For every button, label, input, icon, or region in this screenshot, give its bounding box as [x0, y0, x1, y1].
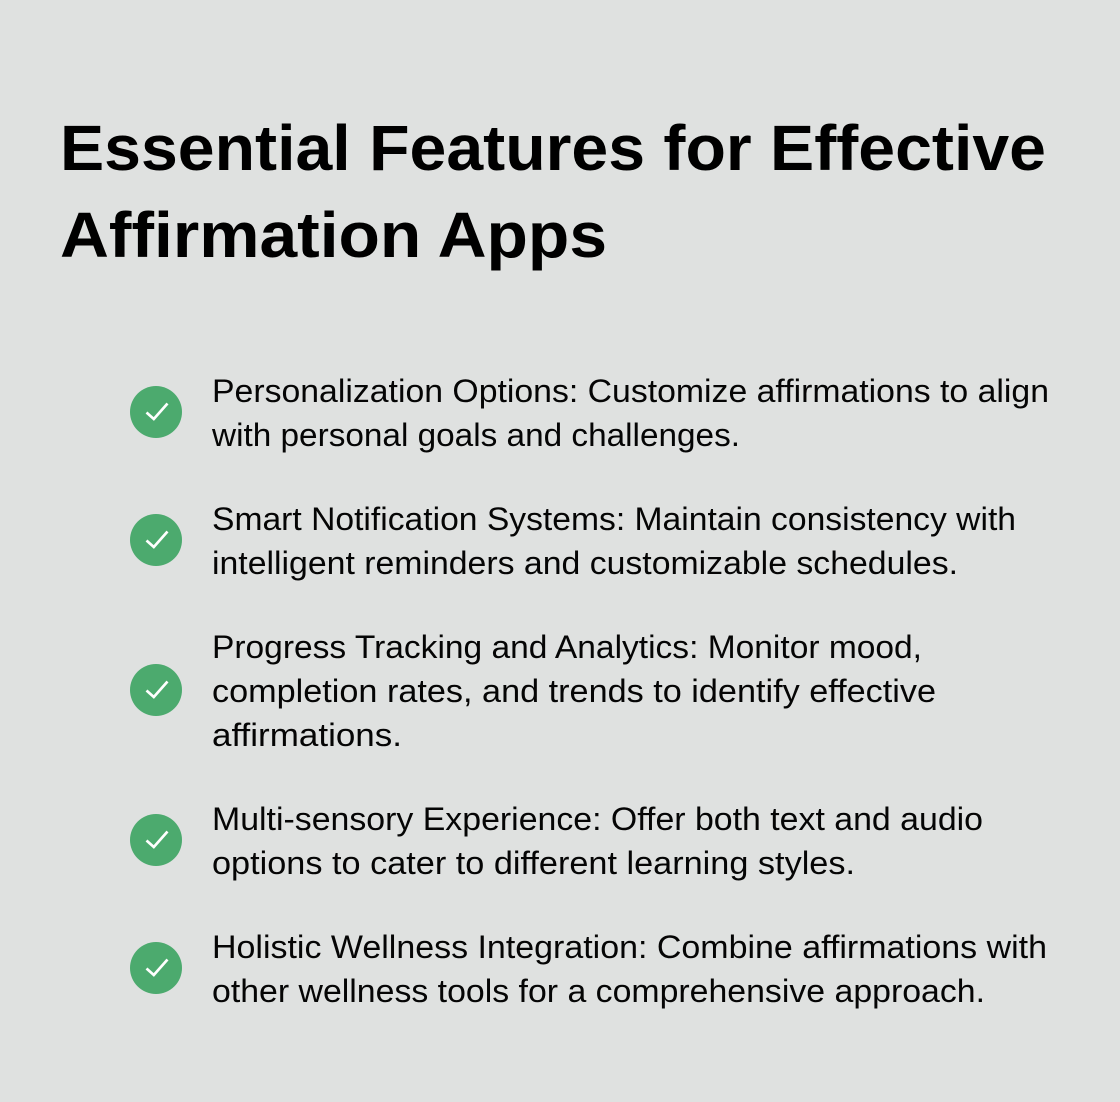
icon: green check circle: [130, 386, 182, 438]
title: [60, 112, 1046, 271]
text: holistic wellness integration: other wellness tools for a comprehensive approach.: [212, 973, 985, 1009]
text: multi-sensory experience: [212, 801, 983, 881]
text: multi-sensory experience: options to cater to different learning styles.: [212, 845, 855, 881]
icon: green check circle: [130, 942, 182, 994]
text: progress tracking and analytics: completion rates, and trends to identify effective: [212, 673, 936, 709]
text: smart notification systems: intelligent reminders and customizable schedules.: [212, 545, 958, 581]
text: holistic wellness integration: Holistic Wellness Integration: Combine affirmations with: [212, 929, 1047, 965]
text: multi-sensory experience: Multi-sensory Experience: Offer both text and audio: [212, 801, 983, 837]
text: progress tracking and analytics: affirmations.: [212, 717, 402, 753]
icon: green check circle: [130, 514, 182, 566]
text: progress tracking and analytics: Progress Tracking and Analytics: Monitor mood,: [212, 629, 922, 665]
feature list: [130, 373, 1049, 1009]
item: progress tracking and analytics: [130, 629, 936, 753]
item: holistic wellness integration: [130, 929, 1047, 1009]
text: personalization options: Personalization Options: Customize affirmations to align: [212, 373, 1049, 409]
item: multi-sensory experience: [130, 801, 983, 881]
icon: green check circle: [130, 814, 182, 866]
item: smart notification systems: [130, 501, 1016, 581]
item: personalization options: [130, 373, 1049, 453]
text: smart notification systems: Smart Notification Systems: Maintain consistency with: [212, 501, 1016, 537]
text: progress tracking and analytics: [212, 629, 936, 753]
text: personalization options: with personal goals and challenges.: [211, 417, 740, 453]
text: personalization options: [211, 373, 1049, 453]
title: Essential Features for Effective: [60, 112, 1046, 184]
text: holistic wellness integration: [212, 929, 1047, 1009]
icon: green check circle: [130, 664, 182, 716]
title: Affirmation Apps: [60, 199, 607, 271]
text: smart notification systems: [212, 501, 1016, 581]
